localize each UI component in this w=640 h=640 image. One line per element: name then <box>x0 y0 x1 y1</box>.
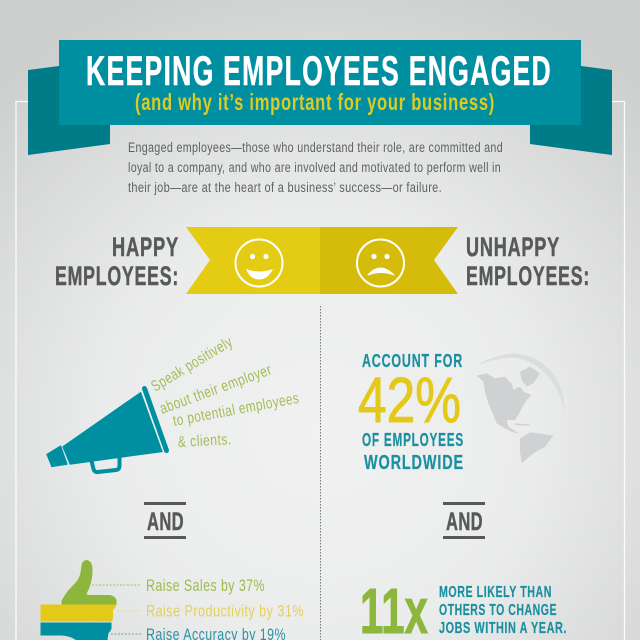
heading: happy employees <box>55 232 179 291</box>
statistic: 42 percent of employees worldwide <box>358 351 565 474</box>
callout: speak positively: Speak positively <box>148 333 236 395</box>
icon: megaphone <box>47 388 167 472</box>
icon: smiley face <box>236 240 282 286</box>
icon: sad face <box>357 240 404 286</box>
separator: and (right) <box>443 502 485 539</box>
intro text: their job—are at the heart of a business’ success—or failure. <box>128 180 442 195</box>
text: more likely than others <box>439 584 567 637</box>
intro text <box>128 140 503 195</box>
icon: thumbs up <box>40 560 116 640</box>
banner fold: right <box>530 66 612 155</box>
heading: happy employees: EMPLOYEES: <box>55 261 179 291</box>
callout: speak positively <box>148 333 301 451</box>
callout: speak positively: & clients. <box>177 431 232 451</box>
intro text: loyal to a company, and who are involved and motivated to perform well in <box>128 160 501 175</box>
ribbon: happy side <box>186 227 320 294</box>
yellow ribbon with faces <box>186 227 458 294</box>
text: more likely than others: MORE LIKELY THAN <box>439 584 552 601</box>
banner front <box>59 40 581 125</box>
heading: happy employees: HAPPY <box>112 232 179 262</box>
heading: unhappy employees <box>466 232 590 291</box>
benefit: productivity: Raise Productivity by 31% <box>146 602 304 620</box>
number: 42%: 42% <box>358 364 461 436</box>
benefit: sales: Raise Sales by 37% <box>146 576 265 595</box>
subtitle: (and why it’s important for your business) <box>135 89 495 115</box>
text: worldwide: WORLDWIDE <box>364 452 464 474</box>
text: account for: ACCOUNT FOR <box>362 351 463 371</box>
text: more likely than others: JOBS WITHIN A YEAR. <box>439 620 567 637</box>
banner fold: left <box>28 66 110 155</box>
callout: speak positively: about their employer <box>158 361 274 418</box>
separator: and (left): AND <box>147 508 184 536</box>
title banner <box>28 40 612 155</box>
intro text: Engaged employees—those who understand their role, are committed and <box>128 140 503 155</box>
heading: unhappy employees: UNHAPPY <box>466 232 560 262</box>
text: more likely than others: OTHERS TO CHANGE <box>439 602 557 619</box>
separator: and (left) <box>144 502 186 539</box>
icon: globe <box>477 353 565 463</box>
callout: speak positively: to potential employees <box>172 390 301 430</box>
statistic: 11x more likely to change jobs <box>360 575 567 640</box>
ribbon: unhappy side <box>320 227 458 294</box>
benefits list <box>92 576 304 640</box>
separator: and (right): AND <box>446 508 483 536</box>
text: of employees: OF EMPLOYEES <box>362 430 464 450</box>
